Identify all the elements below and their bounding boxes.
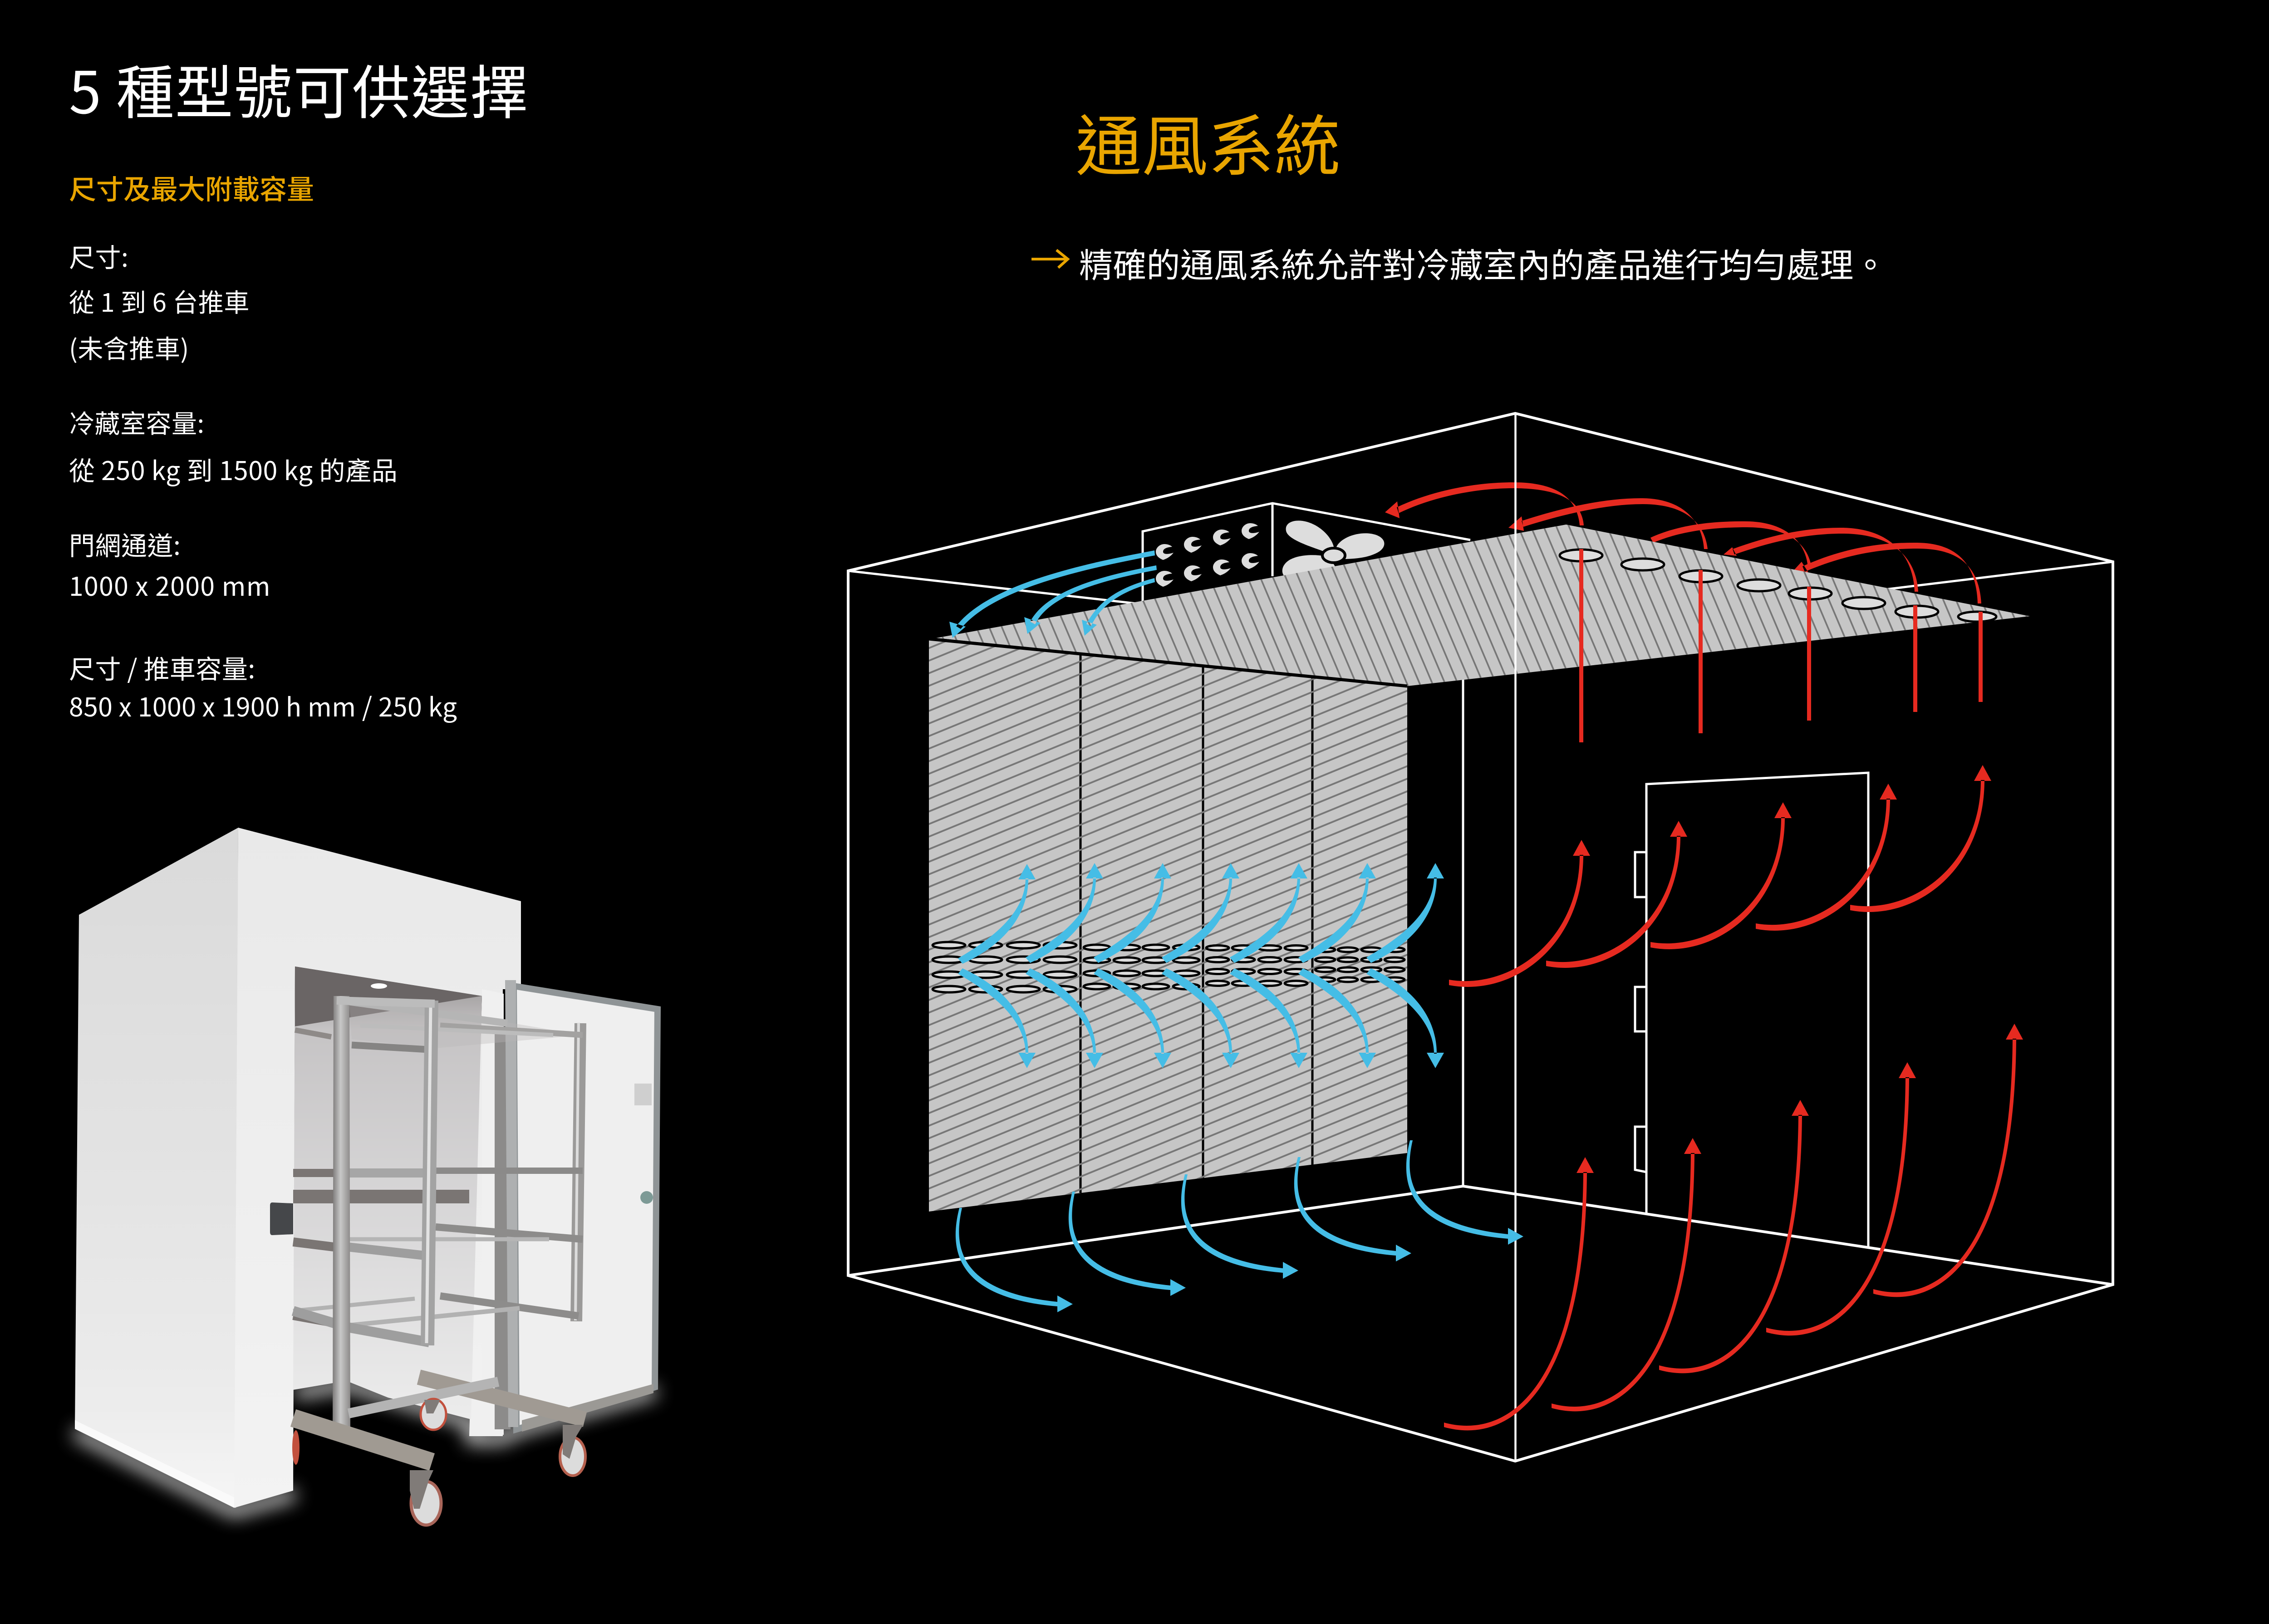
red arrows rising across door (1449, 765, 1991, 987)
product photo: cold room with open door and trolley (75, 828, 658, 1525)
red air pipes down from outlets (1579, 549, 1983, 742)
spec: door size: 1000 x 2000 mm (69, 566, 271, 603)
rear base beam (419, 1377, 585, 1419)
front wall panel (234, 828, 521, 1508)
wall holes (933, 942, 1405, 992)
interior ceiling and lamp (295, 967, 482, 1026)
blue arrows along floor (956, 1140, 1523, 1312)
red arrows rising from floor (1444, 1024, 2023, 1430)
spec: dimensions value: 850 x 1000 x 1900 h mm / 250 kg (69, 687, 457, 724)
casters (292, 1399, 585, 1525)
blue arrows downward across wall (958, 968, 1444, 1068)
shelf fronts (348, 1168, 429, 1178)
subheading: size and max capacity: 尺寸及最大附載容量 (69, 168, 314, 207)
spec: size: 尺寸: (69, 237, 128, 275)
base cross member (349, 1382, 498, 1413)
left wall panel (75, 828, 238, 1508)
door lock (270, 1202, 293, 1235)
top shelf surface (349, 1005, 583, 1048)
title: 5 models: 5 種型號可供選擇 (69, 46, 529, 130)
bottom glow (75, 1384, 656, 1511)
blue cold air arrows from evaporator (949, 550, 1157, 638)
fan unit box (1143, 503, 1470, 601)
front-right post (427, 1001, 432, 1345)
front base beam (293, 1418, 432, 1462)
interior rails (293, 1030, 469, 1323)
text block: specifications (69, 236, 477, 731)
return air arcs, red (1385, 482, 1981, 603)
spec: dimensions and trolley capacity: 尺寸 / 推車容量: (69, 649, 255, 686)
description text: 精確的通風系統允許對冷藏室內的產品進行均勻處理。 (1079, 239, 1887, 287)
ceiling duct (936, 525, 2030, 686)
coil holes (1156, 523, 1259, 587)
spec: door passage: 門網通道: (69, 525, 181, 563)
door outline (1635, 773, 1868, 1247)
fan (1282, 520, 1384, 576)
spec: trolley note: (未含推車) (69, 329, 189, 366)
room wireframe, back edges (848, 413, 2113, 1461)
blue arrows upward across wall (958, 863, 1444, 964)
perforated wall (929, 639, 1407, 1212)
rear frame (576, 1023, 580, 1321)
ventilation diagram (848, 413, 2113, 1461)
front-left post (333, 996, 350, 1429)
open door (514, 986, 658, 1432)
spec: trolleys: 從 1 到 6 台推車 (69, 283, 250, 319)
room interior (293, 967, 482, 1419)
skirting (75, 1420, 234, 1508)
door jamb and hinge post (495, 1030, 511, 1429)
ceiling outlets (1560, 550, 1996, 622)
heading: ventilation system: 通風系統 (1076, 93, 1341, 189)
spec: cold room capacity: 冷藏室容量: (69, 404, 205, 441)
icon: orange arrow (1031, 250, 1068, 268)
spec: product range: 從 250 kg 到 1500 kg 的產品 (69, 451, 398, 488)
trolley rack (292, 996, 585, 1525)
front corner edge (1514, 413, 1517, 1461)
